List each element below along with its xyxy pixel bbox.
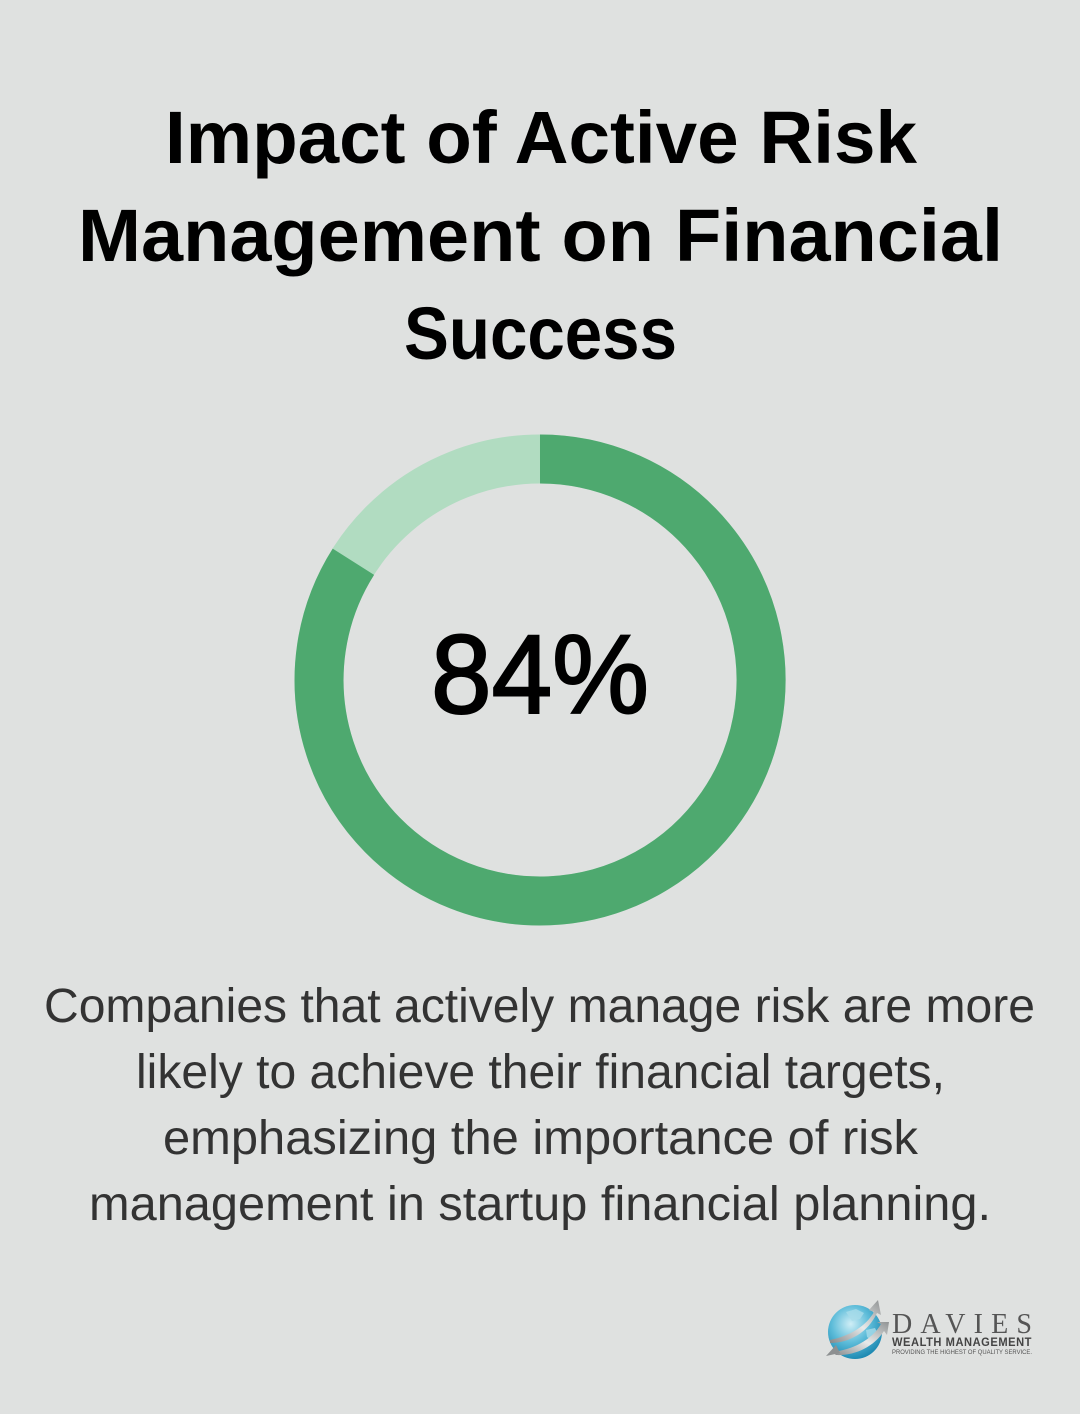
logo: Davies Wealth Management <box>826 1300 1032 1359</box>
description text: Companies that actively manage risk are more <box>44 980 1035 1033</box>
description text: likely to achieve their financial targets, <box>136 1046 945 1099</box>
donut value: 84% <box>431 612 649 737</box>
donut track: remaining 16% <box>319 459 761 901</box>
donut chart: 84% <box>319 459 761 901</box>
title <box>78 96 1003 375</box>
donut arc: 84% <box>319 459 761 901</box>
description text <box>44 980 1035 1231</box>
title: Management on Financial <box>78 194 1003 277</box>
description text: management in startup financial planning. <box>89 1178 991 1231</box>
title: Success <box>404 292 677 375</box>
icon: globe with arrows <box>826 1300 889 1359</box>
title: Impact of Active Risk <box>165 96 918 179</box>
description text: emphasizing the importance of risk <box>163 1112 919 1165</box>
logo tagline: PROVIDING THE HIGHEST OF QUALITY SERVICE. <box>892 1350 1032 1356</box>
logo wordmark: DAVIES <box>892 1309 1032 1340</box>
logo subtitle: WEALTH MANAGEMENT <box>892 1335 1032 1349</box>
